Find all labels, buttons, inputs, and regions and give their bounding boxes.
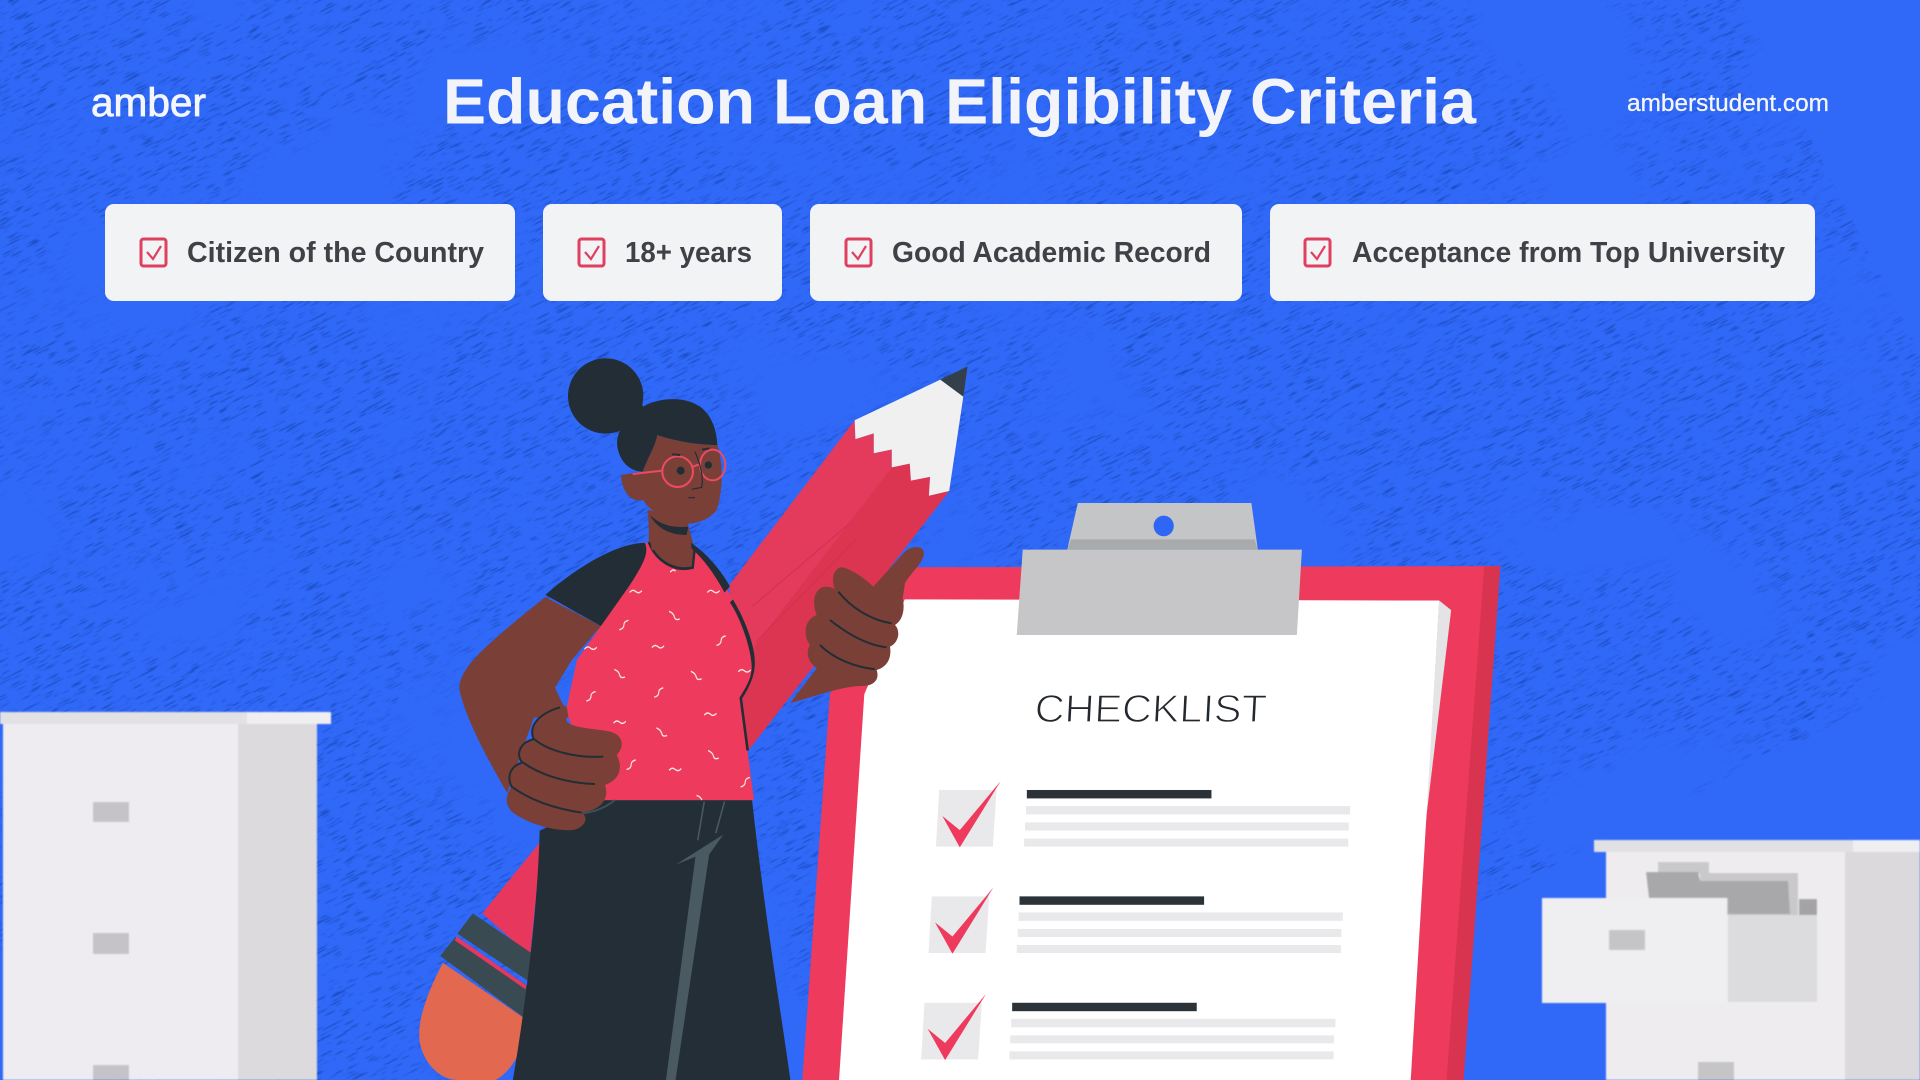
neck [647, 510, 688, 550]
checklist row 1 [936, 781, 1350, 847]
icon: checkbox [846, 239, 871, 266]
woman with pencil [419, 358, 968, 1080]
collar [649, 542, 695, 569]
sleeves [545, 543, 755, 751]
checklist heading: CHECKLIST [1034, 688, 1268, 731]
checklist row 3 [921, 994, 1335, 1060]
paper [839, 599, 1439, 1080]
filing cabinet left [0, 712, 331, 1080]
criterion card: university acceptance [1270, 204, 1815, 301]
criterion card: academic record: Good Academic Record [892, 237, 1211, 269]
neck shadow [650, 515, 688, 535]
shirt [567, 543, 754, 800]
right hand and forearm [790, 547, 924, 703]
criterion card: age: 18+ years [625, 237, 752, 269]
glasses [633, 450, 725, 487]
criterion card: citizen: Citizen of the Country [187, 237, 484, 269]
clip [1017, 503, 1302, 635]
website url: amberstudent.com [1627, 90, 1829, 117]
icon: checkbox [141, 239, 166, 266]
head [568, 358, 725, 550]
hair [617, 390, 717, 472]
filing cabinet right [1542, 840, 1920, 1080]
title: Education Loan Eligibility Criteria [443, 66, 1476, 138]
clipboard board [802, 566, 1500, 1080]
giant pencil [419, 366, 968, 1080]
face [621, 435, 722, 524]
shirt pattern [584, 570, 751, 800]
skirt [513, 800, 790, 1080]
lower neck [649, 510, 695, 569]
logo: amber: amber [91, 81, 206, 125]
criterion card: age [543, 204, 782, 301]
left arm [459, 597, 601, 793]
bun [568, 358, 643, 434]
icon: checkbox [1305, 239, 1330, 266]
icon: checkbox [579, 239, 604, 266]
facial features [672, 447, 712, 498]
checklist row 2 [929, 888, 1343, 954]
criterion card: university acceptance: Acceptance from Top University [1352, 237, 1785, 269]
criterion card: academic record [810, 204, 1242, 301]
left hand [507, 705, 622, 830]
criterion card: citizen [105, 204, 515, 301]
clipboard [802, 503, 1500, 1080]
back sheet [1425, 601, 1451, 824]
